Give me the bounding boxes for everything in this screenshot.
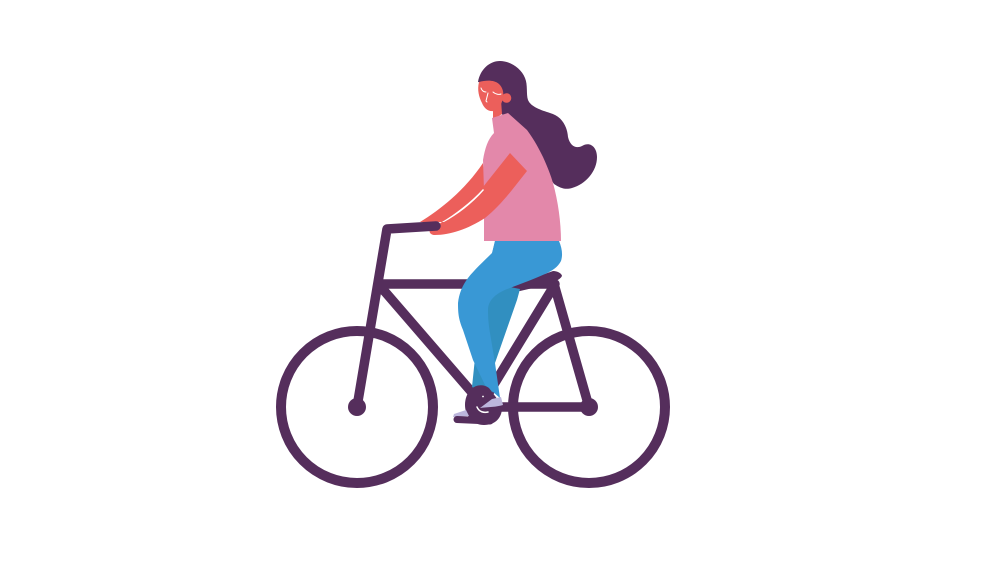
back leg: [472, 241, 520, 398]
front leg and hip: [458, 241, 562, 398]
pedal bar: [457, 420, 490, 421]
ear: [502, 93, 511, 103]
left wheel: [281, 331, 433, 483]
front shoe: [480, 397, 503, 408]
face: [478, 81, 503, 111]
front arm: [430, 153, 527, 235]
back arm: [420, 163, 486, 222]
left hub: [348, 398, 366, 416]
illustration: woman riding a bicycle: [281, 61, 665, 483]
seat: [505, 271, 562, 291]
hair: [478, 61, 597, 189]
shirt: [483, 113, 561, 241]
bicycle: [281, 226, 665, 483]
crank: [465, 385, 502, 425]
neck: [493, 100, 502, 120]
right wheel: [513, 331, 665, 483]
back shoe: [453, 410, 469, 417]
right hub: [580, 398, 598, 416]
frame: [357, 226, 589, 407]
crank highlight: [477, 407, 488, 412]
eyes and nose: [481, 88, 501, 102]
arm highlight: [442, 189, 484, 222]
